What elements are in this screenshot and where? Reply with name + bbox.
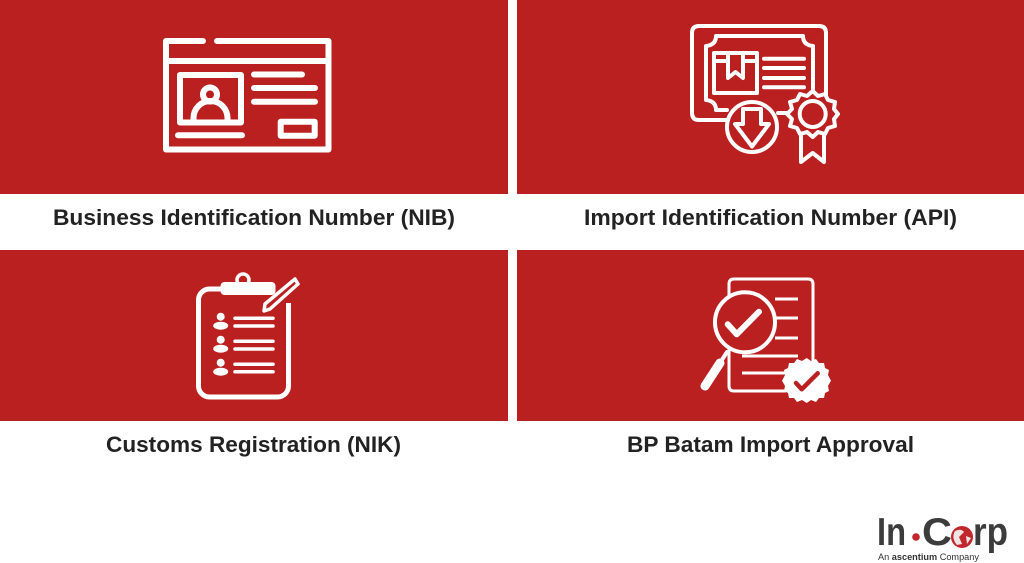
icon: clipboard with pencil [198,274,300,397]
panel: Customs Registration [0,250,508,421]
icon: import certificate [692,26,838,162]
icon: globe [951,526,973,548]
heading: Business Identification Number (NIB): Business Identification Number (NIB) [53,205,455,230]
heading: Customs Registration (NIK): Customs Registration (NIK) [106,432,401,457]
panel: Business Identification Number [0,0,508,194]
logo: InCorp: rp [973,511,1008,554]
logo: InCorp: An ascentium Company [878,552,979,563]
logo: InCorp: C [922,511,952,554]
logo: InCorp [877,511,1008,563]
icon: identification card [166,41,328,150]
panel: Import Identification Number [517,0,1024,194]
panel: BP Batam Import Approval [517,250,1024,421]
logo: InCorp: In [877,511,906,554]
icon: document under magnifier [705,279,831,403]
heading: BP Batam Import Approval: BP Batam Import Approval [627,432,914,457]
heading: Import Identification Number (API): Import Identification Number (API) [584,205,957,230]
